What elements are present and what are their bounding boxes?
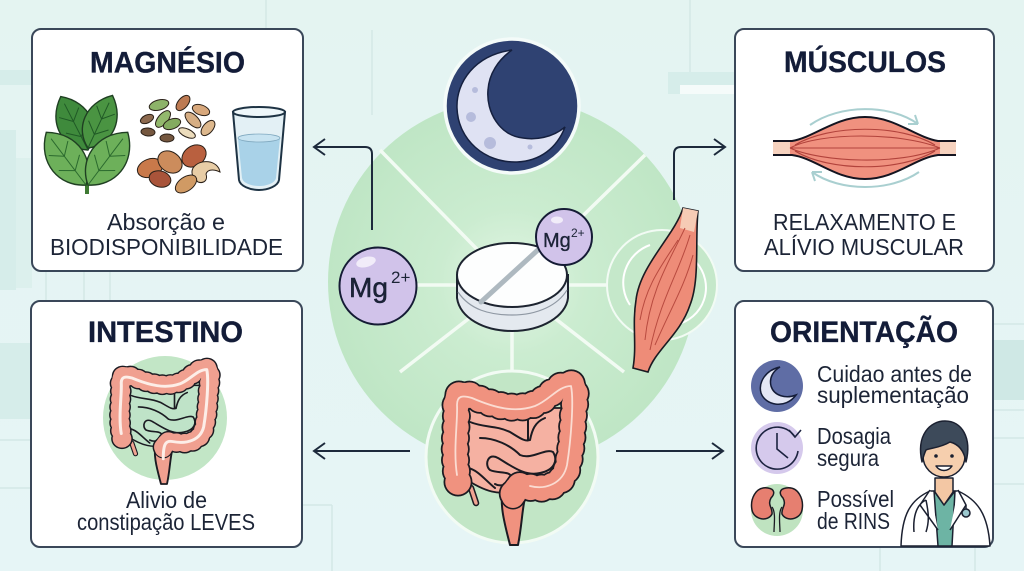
text: kidneys note: de RINS (817, 508, 890, 534)
icon: small moon (751, 360, 803, 412)
text: safe dosage (817, 423, 891, 471)
icon: green leaves (32, 89, 142, 196)
icon: large intestine (426, 371, 598, 545)
arrow: centre to intestine panel (314, 443, 410, 459)
icon: seeds and nuts (135, 93, 220, 197)
icon: clock (751, 422, 803, 474)
text: magnesium caption (50, 209, 283, 260)
text: safe dosage: segura (817, 445, 879, 471)
icon: doctor (901, 421, 990, 546)
text: intestine caption: Alivio de (126, 487, 207, 513)
text: kidneys note (817, 486, 894, 534)
text: intestine caption (77, 487, 255, 535)
central wheel (328, 98, 696, 466)
text: muscles caption: ALÍVIO MUSCULAR (764, 234, 964, 260)
arrow: centre to magnesium panel (314, 139, 372, 230)
arrow: centre to guidance panel (616, 443, 723, 459)
panel: magnesium (32, 29, 303, 271)
icon: magnesium ion left: Mg (349, 272, 388, 303)
text: muscles caption: RELAXAMENTO E (773, 209, 956, 235)
icon: glass of water (233, 107, 285, 190)
icon: kidneys (751, 484, 803, 536)
icon: tablet (457, 243, 568, 331)
text: intestine caption: constipação LEVES (77, 509, 255, 535)
heading: muscles: MÚSCULOS (784, 45, 946, 79)
text: supplementation care: suplementação (817, 382, 969, 408)
icon: magnesium ion on tablet (536, 209, 592, 265)
heading: magnesium: MAGNÉSIO (90, 46, 245, 80)
text: supplementation care (817, 361, 972, 408)
icon: magnesium ion on tablet: Mg (543, 230, 571, 252)
heading: guidance: ORIENTAÇÃO (770, 315, 958, 349)
panel: intestine (31, 301, 302, 547)
panel: guidance (735, 301, 993, 547)
icon: relaxed muscle (773, 109, 956, 187)
text: kidneys note: Possível (817, 486, 894, 512)
icon: intestine illustration (103, 356, 227, 484)
arrow: centre to muscle panel (674, 139, 725, 200)
icon: moon (445, 39, 579, 173)
icon: magnesium ion left: 2+ (391, 268, 410, 287)
text: supplementation care: Cuidao antes de (817, 361, 972, 387)
text: magnesium caption: BIODISPONIBILIDADE (50, 234, 283, 260)
text: safe dosage: Dosagia (817, 423, 891, 449)
text: muscles caption (764, 209, 964, 260)
text: magnesium caption: Absorção e (107, 209, 225, 235)
panel: muscles (735, 29, 994, 271)
icon: muscle in ring (607, 208, 717, 372)
heading: intestine: INTESTINO (88, 316, 243, 349)
icon: magnesium ion left (340, 248, 416, 324)
icon: magnesium ion on tablet: 2+ (571, 226, 585, 240)
